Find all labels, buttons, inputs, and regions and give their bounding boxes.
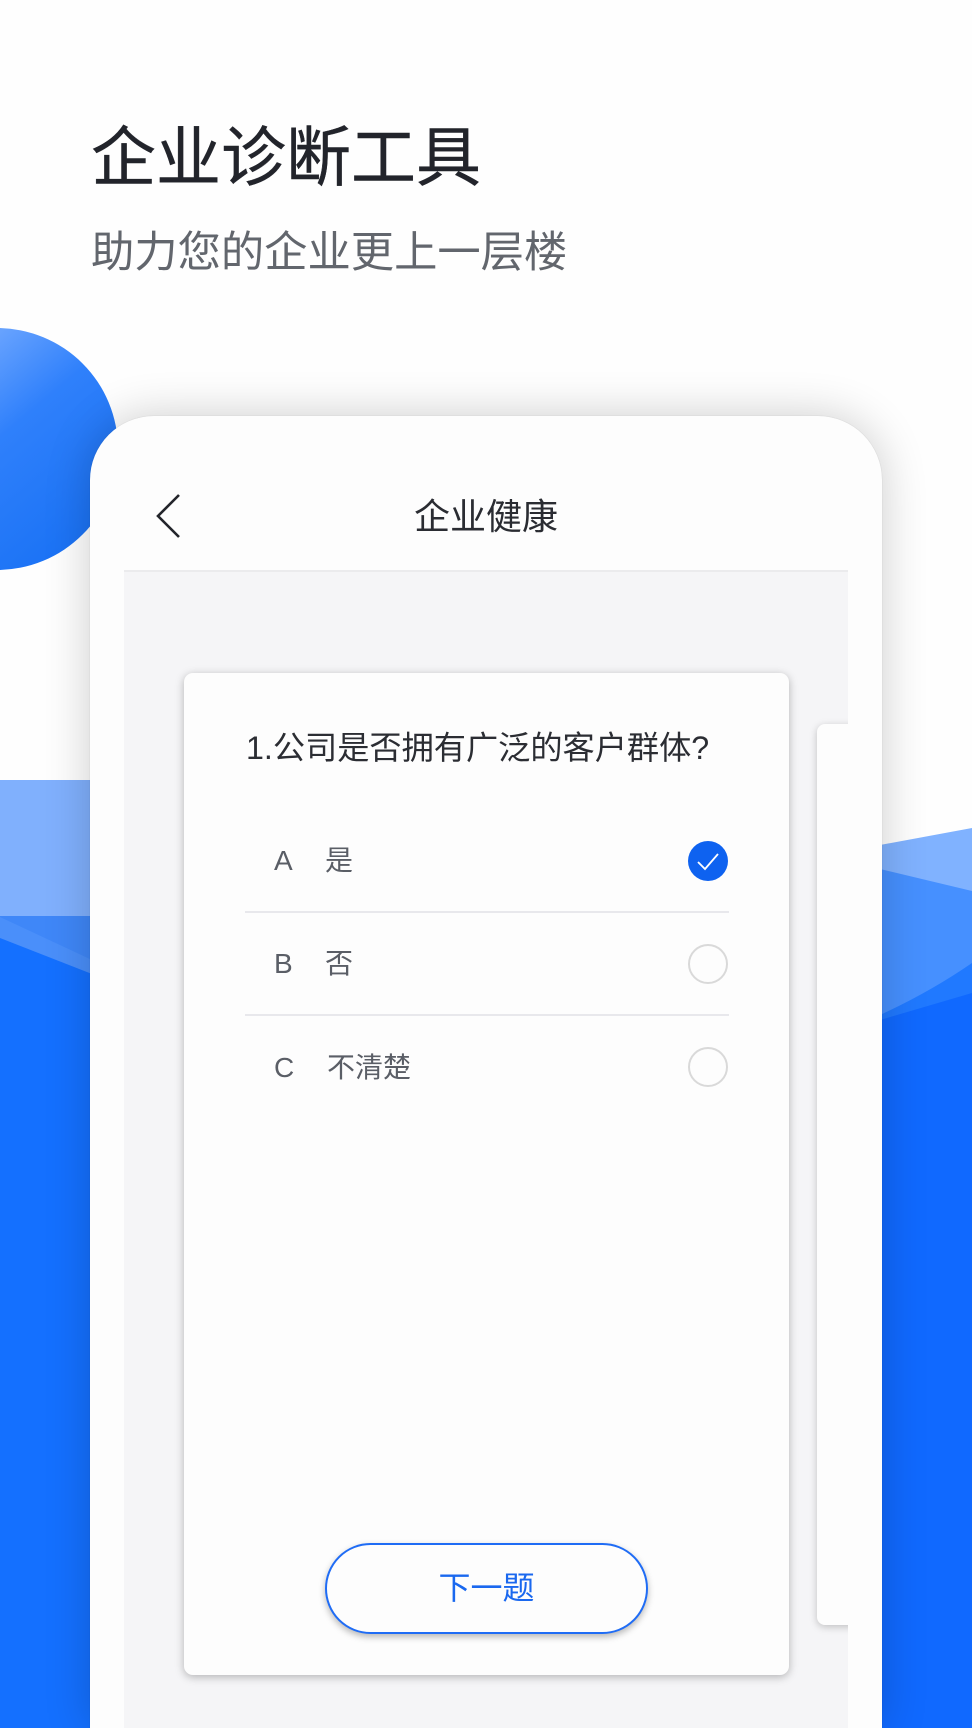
icon: empty radio B <box>688 944 728 984</box>
decorative blue circle <box>0 328 118 570</box>
divider <box>245 911 729 913</box>
icon: back arrow <box>156 494 180 538</box>
option C: 不清楚 <box>327 1052 411 1083</box>
icon: checked radio <box>688 841 728 881</box>
question text: 1.公司是否拥有广泛的客户群体? <box>246 730 709 766</box>
next question button <box>325 1543 648 1634</box>
option A: 是 <box>325 845 353 876</box>
option C <box>274 1052 411 1083</box>
option A: A <box>274 845 293 876</box>
divider <box>245 1014 729 1016</box>
question card <box>184 673 789 1675</box>
option B: B <box>274 948 293 979</box>
grey content background <box>124 572 848 1728</box>
subtitle: 助力您的企业更上一层楼 <box>91 229 567 277</box>
navigation header <box>124 484 848 572</box>
header title: 企业健康 <box>414 496 558 537</box>
next question button: 下一题 <box>438 1570 534 1606</box>
icon: empty radio C <box>688 1047 728 1087</box>
option B: 否 <box>325 948 353 979</box>
left blue waves <box>0 780 90 1728</box>
phone screen <box>124 484 848 1728</box>
option C: C <box>274 1052 294 1083</box>
title: 企业诊断工具 <box>91 121 481 194</box>
next question card peek <box>817 724 877 1625</box>
right blue waves <box>882 828 972 1728</box>
option A <box>274 845 353 876</box>
option B <box>274 948 353 979</box>
phone mockup <box>90 416 882 1728</box>
